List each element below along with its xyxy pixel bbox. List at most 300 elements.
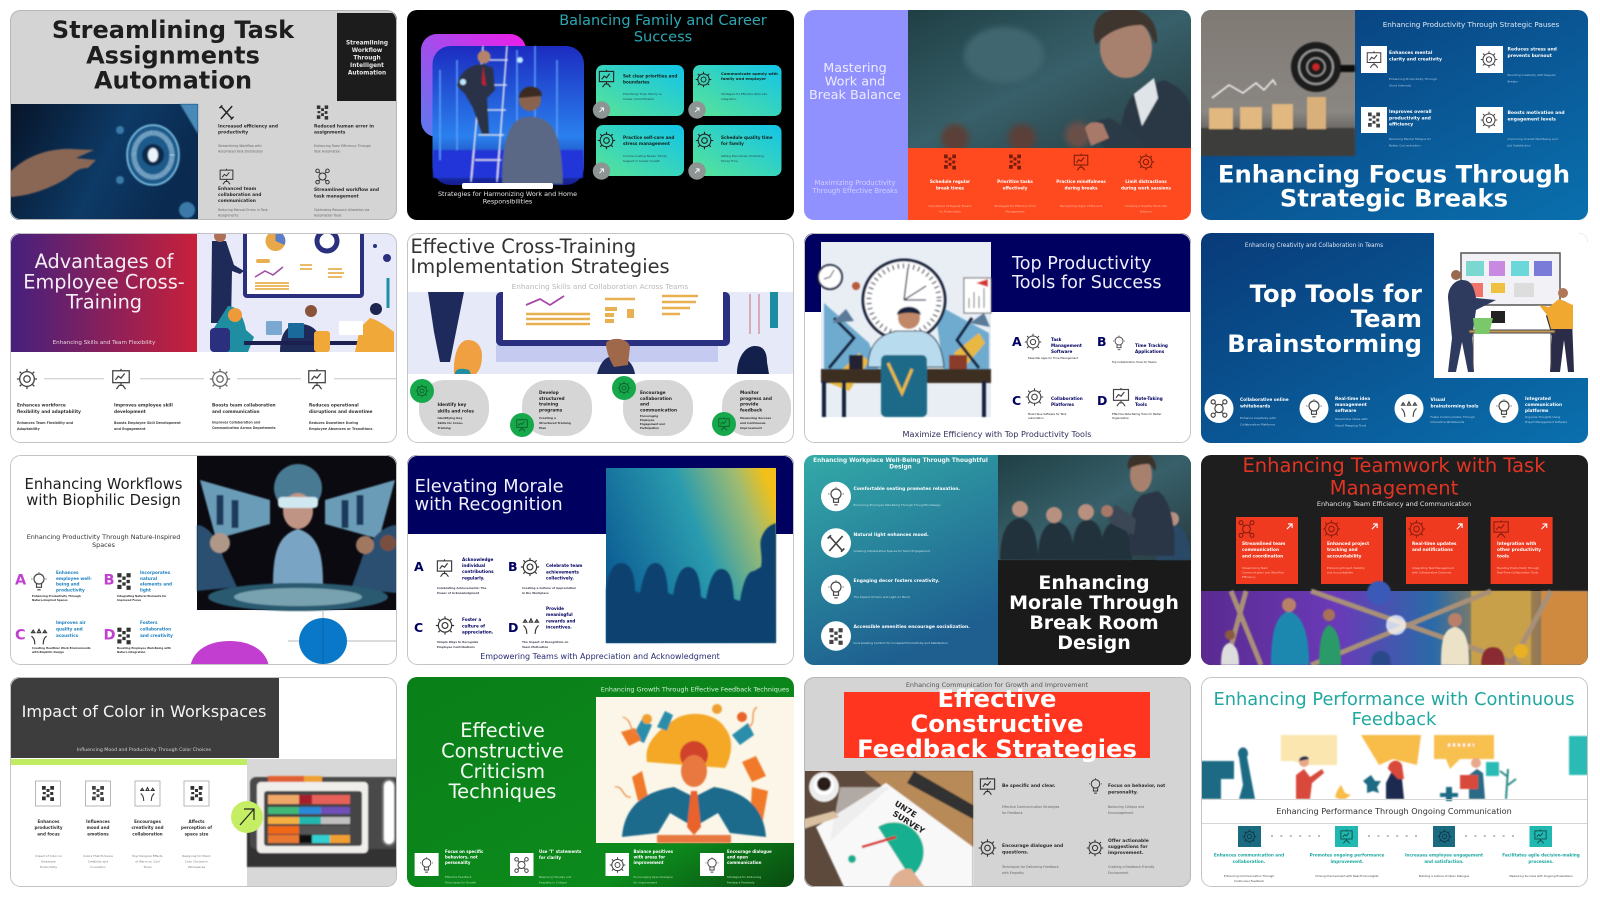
step: performance: improvement. — [1330, 859, 1364, 864]
title block: Employee Cross- — [23, 270, 185, 293]
item C: culture of — [462, 623, 485, 628]
card: clear priorities: Career Commitments — [623, 97, 654, 101]
title: Streamlining Task — [52, 16, 294, 44]
step: decision-making — [1502, 826, 1580, 878]
band: four tips: Practice mindfulness — [1056, 179, 1106, 184]
band: four tips: Limit distractions — [1125, 179, 1167, 184]
title: Techniques — [448, 780, 556, 803]
step: decision-making: Facilitates agile decision-making — [1502, 852, 1580, 858]
feature: reduces stress: Breaks — [1508, 79, 1518, 83]
item B: B — [508, 559, 518, 574]
tool: online whiteboards: Collaborative online — [1240, 398, 1289, 403]
column: space size: Workspaces — [188, 865, 206, 869]
image: survey on clipboard: UN7E — [893, 799, 918, 820]
heading: Enhancing Productivity Through Strategic Pauses — [1383, 20, 1560, 29]
caption: Responsibilities — [483, 198, 533, 206]
item D: meaningful — [546, 612, 573, 617]
section heading: Enhancing Performance Through Ongoing Communication — [1276, 806, 1512, 816]
feature: motivation — [1476, 107, 1565, 147]
column: productivity — [34, 781, 63, 869]
tip: balance positives: improvement — [634, 860, 664, 865]
title: Tools for Success — [1011, 273, 1162, 293]
title block: Constructive — [910, 710, 1084, 738]
accent bar — [10, 759, 247, 765]
title: Automation — [94, 67, 252, 95]
step: develop programs: training — [539, 402, 558, 408]
column: skill development: Improves employee skill — [114, 404, 173, 408]
feature: team collaboration: Reducing Manual Errors in Task — [218, 208, 268, 212]
image: survey on clipboard — [804, 771, 973, 887]
image: overwhelmed thinker — [596, 697, 794, 843]
tool A: Task — [1051, 337, 1061, 342]
band: four tips: for Productivity — [939, 209, 961, 213]
tip: focus on behavior: Encouragement — [1108, 811, 1134, 815]
item: comfortable seating: Comfortable seating promotes relaxation. — [854, 486, 960, 492]
item D: Fosters — [140, 620, 157, 625]
item B: achievements — [546, 569, 579, 574]
tip: I statements — [510, 849, 582, 884]
band: four tips — [908, 148, 1191, 220]
title block: Enhancing Skills and Team Flexibility — [53, 340, 156, 346]
card: communicate openly: Strategies for Effective Work-Life — [721, 92, 767, 96]
tagline: Enhancing Growth Through Effective Feedback Techniques — [601, 686, 790, 694]
feature: increased efficiency: Automated Task Distribution — [218, 150, 263, 154]
item B: B — [104, 572, 115, 588]
item C: appreciation. — [462, 630, 494, 635]
item B: Integrating Natural Elements for — [117, 594, 167, 598]
step: monitor progress: feedback — [740, 407, 762, 413]
title: Enhancing Teamwork with Task — [1242, 454, 1546, 477]
column: mood — [83, 781, 113, 869]
tip: encourage dialogue: and open — [727, 854, 748, 860]
feature: mental clarity — [1361, 46, 1442, 87]
card: streamlined communication: Streamlined team — [1242, 542, 1285, 547]
feature: increased efficiency — [218, 105, 278, 154]
feature: reduces stress: Reduces stress and — [1508, 48, 1557, 52]
step: develop programs: Creating a — [539, 416, 556, 420]
card: project tracking: Enhancing Project Visibility — [1327, 566, 1365, 570]
panel: Top Productivity Tools for Success — [804, 233, 1191, 443]
item: engaging decor: The Impact of Color and Light on Mood — [852, 595, 910, 599]
image: man pointing — [908, 9, 1191, 152]
tip: focus on behaviors: Focus on specific — [445, 849, 483, 854]
card: integration: other productivity — [1497, 547, 1541, 553]
column: mood: emotions — [87, 831, 109, 836]
panel: Advantages of Employee Cross-Training — [10, 229, 397, 443]
column: productivity: Productivity — [40, 865, 57, 869]
card: clear priorities: Set clear priorities and — [623, 74, 677, 78]
item D: The Impact of Recognition on — [522, 640, 568, 644]
tool: communication platforms: communication — [1525, 402, 1562, 408]
item A: contributions — [462, 569, 494, 574]
item: accessible amenities — [821, 621, 970, 651]
tool B: Applications — [1135, 349, 1165, 354]
tool C — [1012, 388, 1083, 420]
band: four tips: during work sessions — [1121, 185, 1172, 190]
tip: focus on behaviors: behaviors, not — [445, 854, 478, 860]
tip: encourage dialogue: communication — [727, 860, 762, 865]
title: Success — [634, 30, 692, 46]
column: workforce flexibility: Enhances Team Flexibility and — [17, 421, 73, 425]
tip: encourage dialogue: Encourage dialogue and — [1002, 844, 1063, 849]
image: futuristic meeting — [197, 455, 397, 611]
card: communicate openly: Integration — [721, 97, 737, 101]
subtitle: Enhancing Productivity Through Nature-Inspired — [27, 533, 180, 541]
tool: communication platforms — [1490, 394, 1567, 424]
step: engagement: and satisfaction. — [1424, 859, 1464, 864]
feature: reduced human error: assignments — [314, 130, 346, 136]
step: identify skills: Identify key — [438, 403, 466, 408]
feature: reduces stress: prevents burnout — [1508, 53, 1553, 59]
feature: streamlined workflow: Streamlined workflow and — [314, 188, 379, 193]
card: real-time updates: Integrating Task Management — [1412, 566, 1454, 570]
step: develop programs — [510, 380, 592, 437]
step: encourage collaboration: communication — [640, 407, 677, 413]
card: real-time updates: and notifications — [1412, 547, 1453, 553]
card: self-care — [593, 125, 684, 180]
item B: Incorporates — [140, 570, 170, 575]
feature: mental clarity: Short Intervals — [1389, 83, 1411, 87]
tagline: Enhancing Communication for Growth and Improvement — [906, 681, 1089, 689]
step: encourage collaboration: Encouraging — [640, 415, 658, 418]
column: mood: Colors That Enhance — [83, 854, 113, 858]
item B: Celebrate team — [546, 563, 582, 568]
tool: visual brainstorming — [1394, 394, 1479, 424]
feature: overall productivity: efficiency — [1389, 122, 1413, 128]
column: workforce flexibility: flexibility and adaptability — [17, 409, 81, 415]
tip: encourage dialogue: questions. — [1002, 849, 1029, 855]
card: streamlined communication: Streamlining Team — [1242, 566, 1268, 570]
card: integration: Integration with — [1497, 542, 1536, 547]
item A: being and — [56, 582, 80, 587]
band: four tips: Recognizing Signs of Burnout — [1060, 204, 1103, 208]
tool: communication platforms: Project Management Software — [1525, 420, 1567, 424]
column: mood: Influences — [86, 819, 110, 824]
title: Assignments — [86, 41, 260, 69]
column: productivity: and focus — [37, 831, 60, 836]
column: space size: Color Choices in — [185, 860, 208, 864]
title: Morale Through — [1009, 592, 1179, 614]
tool C: Collaboration — [1051, 396, 1083, 401]
item C: quality and — [56, 626, 83, 631]
tool: idea management: Streamline Ideas with — [1335, 417, 1368, 421]
tool D: Organization — [1112, 416, 1129, 420]
title: Enhancing Workflows — [25, 476, 182, 493]
item: accessible amenities: Accessible amenities encourage socialization. — [854, 624, 970, 630]
column: team collaboration: and communication — [212, 409, 260, 415]
tip: encourage dialogue: Strategies for Delivering — [727, 875, 761, 879]
title: Strategic Breaks — [1280, 184, 1508, 212]
card: real-time updates: Real-time updates — [1412, 542, 1456, 547]
step: encourage collaboration — [612, 376, 693, 436]
feature: reduced human error: Enhancing Team Efficiency Through — [314, 144, 371, 148]
tagline: Enhancing Creativity and Collaboration in Teams — [1245, 243, 1383, 249]
tool C: Must-Have Software for Task — [1028, 412, 1066, 416]
tool D: Effective Note-Taking Tools for Better — [1112, 412, 1161, 416]
tip: focus on behavior: Focus on behavior, not — [1108, 784, 1165, 789]
tip: encourage dialogue: Feedback Positively — [727, 880, 755, 884]
item A: employee well- — [56, 576, 92, 581]
item A: Enhancing Productivity Through — [32, 594, 81, 598]
tip: balance positives: for Improvement — [634, 880, 658, 884]
tip: focus on behaviors — [415, 849, 484, 884]
card: quality time — [688, 125, 782, 180]
card: quality time: Family Time — [721, 159, 738, 163]
item C: Foster a — [462, 617, 481, 622]
title: Enhancing Focus Through — [1218, 160, 1570, 188]
title block: Impact of Color in Workspaces — [22, 702, 266, 721]
title block: Effective — [938, 685, 1056, 713]
card: clear priorities — [593, 65, 684, 119]
card: quality time: Schedule quality time — [721, 135, 773, 140]
band: four tips: Strategies for Effective Time — [994, 204, 1036, 208]
item C: Employee Contributions — [437, 645, 475, 649]
subtitle: Maximizing Productivity — [815, 179, 895, 187]
card: project tracking: tracking and — [1327, 547, 1358, 553]
step: encourage collaboration: collaboration — [640, 396, 672, 402]
step: develop programs: Develop — [539, 391, 559, 396]
image: man on ladder — [421, 34, 584, 185]
subtitle box: Through — [353, 56, 381, 62]
step: monitor progress — [712, 380, 791, 436]
title: Top Productivity — [1012, 254, 1152, 274]
decoration: blue circle and magenta semicircle — [191, 610, 397, 665]
column: skill development: Boosts Employee Skill Development — [114, 421, 181, 425]
title: Team — [1351, 305, 1422, 333]
tip: focus on behavior: personality. — [1108, 789, 1138, 795]
tip: actionable suggestions: suggestions for — [1108, 844, 1148, 850]
feature: overall productivity: Reducing Mental Fatigue for — [1389, 137, 1431, 141]
feature: increased efficiency: Increased efficiency and — [218, 124, 278, 130]
tip: focus on behavior — [1089, 778, 1166, 815]
card: streamlined communication — [1236, 517, 1298, 584]
tool: visual brainstorming: Visual — [1430, 398, 1445, 403]
item C: Improves air — [56, 620, 86, 625]
item B: Creating a Culture of Appreciation — [522, 586, 576, 590]
title block: Advantages of — [35, 250, 173, 273]
step: identify skills: Identifying Key — [438, 416, 462, 420]
item: natural light: Natural light enhances mood. — [854, 532, 929, 538]
step: develop programs: Structured Training — [539, 421, 571, 425]
feature: team collaboration: Assignments — [218, 214, 239, 218]
title block — [844, 685, 1150, 763]
card: real-time updates: with Collaborative Channels — [1412, 570, 1452, 574]
tip: I statements: for clarity — [539, 855, 562, 860]
card: quality time: for family — [721, 141, 744, 146]
step: decision-making: processes. — [1528, 859, 1554, 864]
column: workforce flexibility: Adaptability — [17, 427, 41, 431]
band: four tips: Balance — [1140, 209, 1152, 213]
tip: actionable suggestions: Creating a Feedback-Friendly — [1108, 865, 1154, 869]
card: self-care: Practice self-care and — [623, 135, 674, 140]
icon: lime arrow — [231, 801, 263, 833]
tool D — [1097, 388, 1163, 420]
tool: online whiteboards — [1204, 394, 1289, 426]
item D: D — [508, 620, 518, 635]
title: Brainstorming — [1227, 330, 1422, 358]
feature: reduced human error: Task Automation — [313, 150, 340, 154]
item C: C — [414, 620, 423, 635]
card: project tracking: accountability — [1327, 553, 1362, 559]
step: engagement: Increases employee engagement — [1405, 852, 1483, 858]
column: team collaboration: Communication Across Departments — [212, 426, 276, 430]
feature: reduces stress — [1476, 46, 1557, 83]
panel: Effective Constructive Criticism Techniques — [407, 677, 794, 887]
tip: actionable suggestions — [1087, 838, 1155, 875]
tool: communication platforms: Integrated — [1525, 397, 1551, 402]
title block: Training — [65, 291, 142, 314]
tool: visual brainstorming: Interactive Whiteboards — [1430, 420, 1465, 424]
feature: mental clarity: Enhancing Productivity Through — [1389, 77, 1437, 81]
title: Enhancing Performance with Continuous — [1214, 689, 1574, 710]
item A: Enhances — [56, 570, 78, 575]
item A: individual — [462, 563, 486, 568]
subtitle box: Automation — [348, 70, 386, 76]
step: performance — [1310, 826, 1385, 878]
tool: visual brainstorming: brainstorming tools — [1430, 404, 1479, 410]
column: productivity: Enhances — [38, 819, 59, 824]
card: quality time: Setting Boundaries: Protecting — [721, 154, 764, 158]
image: hand touching digital interface — [10, 104, 198, 220]
step: communication: Continuous Feedback — [1234, 879, 1264, 883]
column: space size: Affects — [188, 819, 205, 824]
feature: overall productivity: Better Concentration — [1389, 143, 1421, 147]
title: Break Room — [1029, 612, 1159, 634]
title: with Recognition — [415, 494, 563, 515]
card: streamlined communication: Efficiency — [1242, 575, 1256, 579]
column: team collaboration — [210, 369, 276, 430]
column: creativity — [131, 781, 164, 869]
card: integration — [1491, 517, 1553, 584]
column: operational disruptions: Reduces Downtime During — [309, 421, 358, 425]
item A: A — [414, 559, 424, 574]
feature: motivation: engagement levels — [1508, 116, 1556, 122]
band: four tips: Importance of Regular Breaks — [928, 204, 972, 208]
panel: Enhancing Teamwork with Task Management — [1201, 454, 1588, 665]
band: four tips: break times — [936, 185, 965, 190]
image: man pointing with team — [998, 454, 1191, 560]
item D: collaboration — [140, 626, 171, 631]
feature: increased efficiency: Streamlining Workflow with — [218, 144, 262, 148]
item B: elements and — [140, 582, 172, 587]
tip: balance positives: with areas for — [634, 854, 665, 860]
title: Criticism — [460, 760, 545, 783]
title: Work and — [825, 74, 885, 89]
title: Design — [1057, 632, 1131, 654]
step: performance: Driving Improvement with Real-Time Insights — [1316, 874, 1379, 878]
tool: idea management: Visual Mapping Tools — [1335, 424, 1367, 428]
step: encourage collaboration: and — [640, 402, 649, 408]
panel: Top Tools for Team Brainstorming — [1201, 233, 1588, 443]
item D: incentives. — [546, 625, 572, 630]
card: real-time updates — [1406, 517, 1468, 584]
tip: encourage dialogue — [700, 849, 772, 884]
image: team on scaffolding — [1201, 581, 1588, 665]
column: productivity: Employee — [41, 860, 56, 864]
tip: balance positives — [606, 849, 674, 884]
title: Management — [1330, 476, 1459, 500]
card: communicate openly: Communicate openly with — [721, 71, 778, 76]
subtitle box: Workflow — [352, 48, 383, 54]
feature: team collaboration — [218, 169, 268, 218]
card: integration: tools — [1497, 553, 1509, 559]
tip: encourage dialogue: with Empathy — [1002, 871, 1024, 875]
feature: motivation: Boosts motivation and — [1508, 111, 1565, 116]
column: operational disruptions: Reduces operational — [309, 404, 359, 408]
tip: I statements: Empathy in Critique — [539, 880, 567, 884]
tip: actionable suggestions: improvement. — [1108, 850, 1144, 856]
tool B: B — [1097, 334, 1107, 349]
tip: be specific: Be specific and clear. — [1002, 783, 1056, 789]
item C: Simple Ways to Recognize — [437, 640, 478, 644]
panel: Enhancing Focus Through Strategic Breaks — [1201, 10, 1588, 220]
step: performance: Promotes ongoing performance — [1310, 852, 1384, 858]
item D: Nature Integration — [117, 650, 145, 654]
tip: balance positives: Balance positives — [634, 849, 673, 854]
item A: Celebrating Achievements: The — [437, 586, 486, 590]
tip: focus on behavior: Balancing Critique and — [1108, 805, 1144, 809]
item D: Boosting Employee Well-Being with — [117, 646, 171, 650]
item C — [15, 620, 91, 654]
tool C: Automation — [1028, 416, 1044, 420]
feature: streamlined workflow: Automation Tools — [314, 214, 342, 218]
item C: C — [15, 628, 26, 644]
tool B — [1097, 334, 1168, 364]
column: productivity: Impact of Color on — [35, 854, 62, 858]
feature: mental clarity: Enhances mental — [1389, 51, 1432, 56]
item B: collectively. — [546, 576, 574, 581]
step: encourage collaboration: Employee — [640, 418, 654, 422]
tip: encourage dialogue — [979, 839, 1063, 875]
item B — [508, 558, 583, 595]
step: identify skills: Training — [438, 426, 451, 430]
column: creativity: collaboration — [132, 831, 163, 836]
title: Implementation Strategies — [410, 255, 670, 278]
item B: light — [140, 587, 151, 592]
feature: streamlined workflow: Optimizing Resource Allocation via — [314, 208, 369, 212]
card: streamlined communication: and coordination — [1242, 553, 1283, 559]
subtitle box: Intelligent — [350, 63, 384, 69]
tool A: Essential Apps for Time Management — [1028, 356, 1078, 360]
image: wooden blocks and dial — [1201, 10, 1355, 156]
feature: streamlined workflow: task management — [314, 193, 359, 199]
feature: reduced human error: Reduced human error in — [314, 124, 374, 130]
image: color palette tablet — [247, 759, 400, 887]
feature: team collaboration: collaboration and — [218, 192, 261, 198]
title: Break Balance — [809, 88, 901, 103]
step: encourage collaboration: Participation — [640, 426, 659, 430]
item: natural light: Creating Collaborative Spaces for Team Engagement — [854, 549, 931, 553]
item D — [508, 606, 575, 649]
card: streamlined communication: Communication and Workflow — [1242, 570, 1285, 574]
image: survey on clipboard: SURVEY — [891, 809, 926, 836]
column: operational disruptions — [309, 369, 373, 431]
step: monitor progress: Measuring Success — [740, 416, 771, 420]
column: creativity: of Warm vs. Cool — [135, 860, 160, 864]
tip: focus on behaviors: personality — [445, 860, 471, 865]
header band — [407, 455, 794, 534]
card: project tracking: Enhanced project — [1327, 542, 1369, 547]
heading: Design — [889, 464, 912, 470]
tool A: A — [1012, 334, 1022, 349]
item: engaging decor: Engaging decor fosters creativity. — [854, 578, 940, 584]
column: space size: Designing for Mood: — [182, 854, 211, 858]
white bar — [462, 183, 553, 189]
step: communication: Enhances communication and — [1214, 852, 1284, 858]
card: communicate openly — [688, 65, 782, 119]
step: develop programs: structured — [539, 396, 565, 402]
tip: actionable suggestions: Offer actionable — [1108, 839, 1149, 844]
